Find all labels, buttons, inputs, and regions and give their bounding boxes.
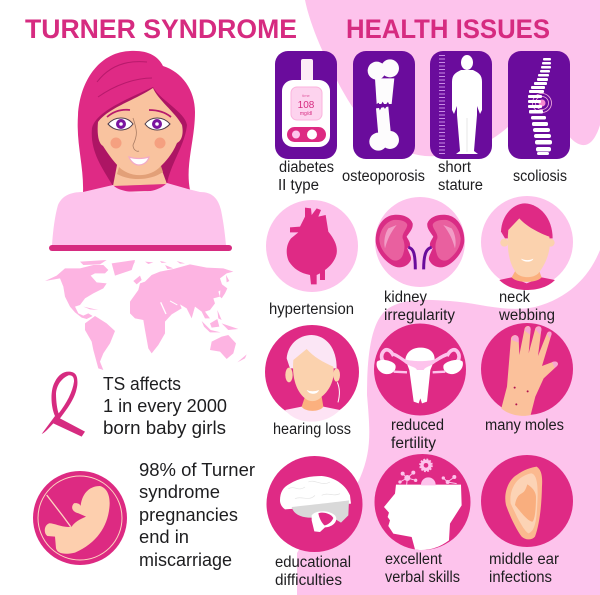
icon: fetus in circle xyxy=(33,471,127,565)
label: hypertension: hypertension xyxy=(269,301,354,318)
panel: middle ear infections xyxy=(481,455,573,547)
label: kidney irregularity xyxy=(384,289,455,324)
panel: kidney irregularity xyxy=(375,197,465,287)
icon: pink ribbon xyxy=(42,372,85,437)
text: TS prevalence: born baby girls xyxy=(103,417,226,438)
map: world xyxy=(45,260,247,370)
label: reduced fertility: reduced xyxy=(391,417,444,434)
label: neck webbing: webbing xyxy=(498,307,555,324)
title: Turner Syndrome: TURNER SYNDROME xyxy=(25,14,297,44)
label: many moles: many moles xyxy=(485,417,564,434)
panel: excellent verbal skills xyxy=(374,454,470,550)
label: kidney irregularity: kidney xyxy=(384,289,427,306)
panel: hypertension xyxy=(266,200,358,292)
panel: diabetes: 108 xyxy=(298,100,315,111)
label: excellent verbal skills: verbal skills xyxy=(385,569,460,586)
panel: diabetes: time xyxy=(302,93,311,98)
label: diabetes: II type xyxy=(278,177,319,194)
text: miscarriage statistic: 98% of Turner xyxy=(139,459,255,480)
illustration: woman portrait xyxy=(49,51,232,251)
label: hearing loss: hearing loss xyxy=(273,421,351,438)
label: short stature: stature xyxy=(438,177,483,194)
panel: osteoporosis xyxy=(353,51,415,159)
text: miscarriage statistic: syndrome xyxy=(139,481,220,502)
label: neck webbing: neck xyxy=(499,289,530,306)
panel: educational difficulties xyxy=(266,456,362,552)
label: middle ear infections xyxy=(489,551,559,586)
panel: hearing loss xyxy=(265,325,359,422)
label: excellent verbal skills xyxy=(385,551,460,586)
panel: short stature xyxy=(430,51,492,159)
text: miscarriage statistic: end in xyxy=(139,526,189,547)
background: pink blobs xyxy=(297,0,600,595)
panel: diabetes: mg/dl xyxy=(300,111,312,117)
panel: neck webbing xyxy=(481,196,573,290)
eyes xyxy=(108,118,170,130)
text: TS prevalence: TS affects xyxy=(103,373,181,394)
text: TS prevalence xyxy=(103,373,227,438)
label: middle ear infections: middle ear xyxy=(489,551,559,568)
title: Health Issues: HEALTH ISSUES xyxy=(346,14,550,44)
label: reduced fertility: fertility xyxy=(391,435,436,452)
label: kidney irregularity: irregularity xyxy=(384,307,455,324)
label: diabetes: diabetes xyxy=(279,159,334,176)
label: short stature xyxy=(438,159,483,194)
label: scoliosis: scoliosis xyxy=(513,168,567,185)
label: middle ear infections: infections xyxy=(489,569,552,586)
label: educational difficulties xyxy=(275,554,351,589)
text: TS prevalence: 1 in every 2000 xyxy=(103,395,227,416)
label: short stature: short xyxy=(438,159,472,176)
panel: scoliosis xyxy=(508,51,570,159)
text: miscarriage statistic: miscarriage xyxy=(139,549,232,570)
label: neck webbing xyxy=(498,289,555,324)
panel: many moles xyxy=(481,323,573,416)
label: educational difficulties: difficulties xyxy=(275,572,342,589)
label: excellent verbal skills: excellent xyxy=(385,551,443,568)
label: reduced fertility xyxy=(391,417,444,452)
text: miscarriage statistic: pregnancies xyxy=(139,504,238,525)
panel: reduced fertility xyxy=(374,324,466,416)
label: diabetes xyxy=(278,159,334,194)
panel: diabetes xyxy=(275,51,337,159)
text: miscarriage statistic xyxy=(139,459,255,570)
label: educational difficulties: educational xyxy=(275,554,351,571)
label: osteoporosis: osteoporosis xyxy=(342,168,425,185)
